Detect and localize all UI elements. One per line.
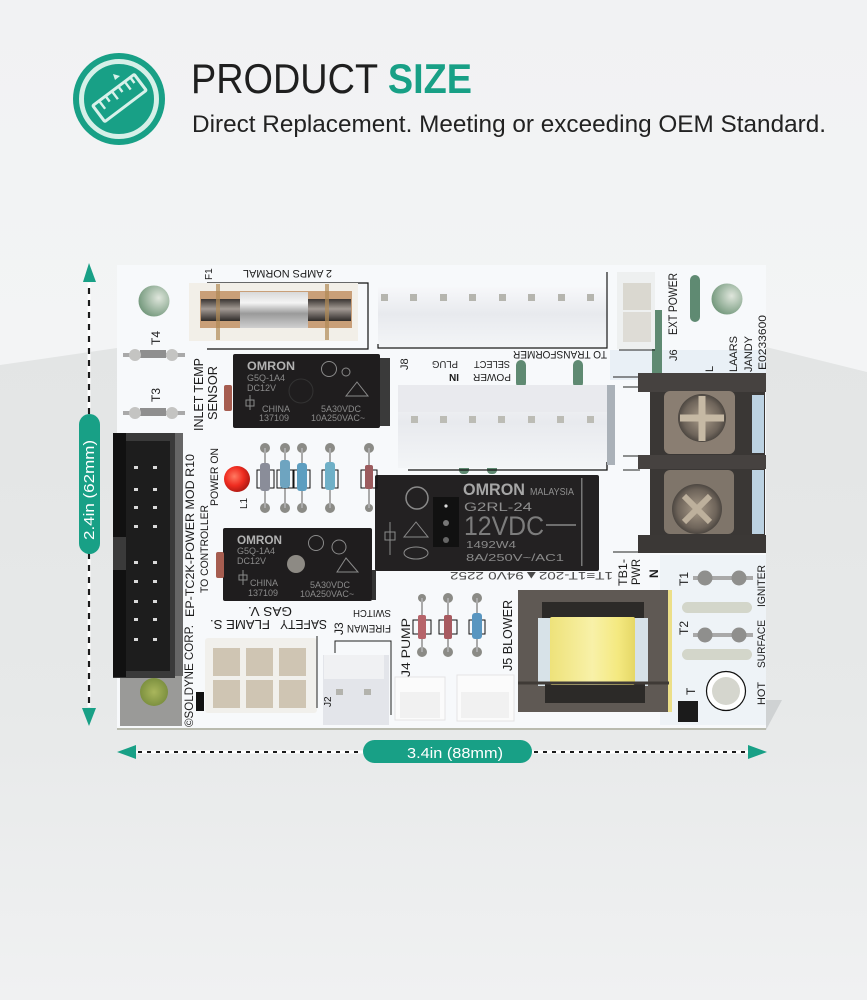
relay: lower Omron: CHINA xyxy=(250,578,278,588)
silkscreen labels: SELECT xyxy=(474,358,510,369)
silkscreen labels: IGNITER xyxy=(756,565,768,607)
J7 connector xyxy=(398,385,615,470)
silkscreen labels: 1T≡1T-202▲94V0 2252 xyxy=(450,569,613,581)
silkscreen labels: ©SOLDYNE CORP. xyxy=(182,625,196,727)
height dimension arrow xyxy=(82,263,96,726)
silkscreen labels: F1 xyxy=(204,268,215,280)
silkscreen labels: J3 xyxy=(332,622,346,635)
silkscreen labels: T3 xyxy=(149,388,163,402)
J2 connector xyxy=(323,641,391,725)
silkscreen labels: JANDY xyxy=(743,335,755,372)
silkscreen labels: SENSOR xyxy=(205,366,220,420)
fuse holder xyxy=(189,283,368,349)
relay: upper Omron: 137109 xyxy=(259,413,289,423)
beige slots and hot pad xyxy=(678,602,752,722)
relay: large Omron: MALAYSIA xyxy=(530,487,574,498)
relay: upper Omron: 10A250VAC~ xyxy=(311,413,365,423)
terminal block xyxy=(613,373,766,553)
silkscreen labels: POWER xyxy=(473,371,511,382)
relay: lower Omron: 5A30VDC xyxy=(310,580,351,590)
relay: upper Omron: 5A30VDC xyxy=(321,404,362,414)
silkscreen labels: SAFETY xyxy=(280,617,327,632)
silkscreen labels: J4 PUMP xyxy=(399,618,413,677)
relay: upper Omron: G5Q-1A4 xyxy=(247,373,285,383)
relay: large Omron: 1492W4 xyxy=(466,540,517,551)
silkscreen labels: J6 xyxy=(668,349,680,361)
J8 connector xyxy=(378,272,608,348)
relay: upper Omron xyxy=(233,354,390,428)
silkscreen labels: INLET TEMP xyxy=(191,358,206,431)
silkscreen labels: POWER ON xyxy=(209,448,221,506)
T1 T2 tabs xyxy=(693,570,753,642)
relay: upper Omron: DC12V xyxy=(247,383,276,393)
height label pill: 2.4in (62mm) xyxy=(81,440,98,540)
silkscreen labels: TO CONTROLLER xyxy=(199,505,211,593)
silkscreen labels: L xyxy=(704,366,716,372)
silkscreen labels: FLAME S. xyxy=(210,617,270,632)
relay: lower Omron xyxy=(223,528,376,601)
LED xyxy=(224,466,250,492)
relay: lower Omron: OMRON xyxy=(237,533,282,547)
relay: large Omron: G2RL-24 xyxy=(464,500,532,514)
silkscreen labels: T2 xyxy=(677,621,691,635)
silkscreen labels: N xyxy=(647,569,661,578)
height label pill xyxy=(79,414,100,554)
silkscreen labels: 2 AMPS NORMAL xyxy=(243,267,332,279)
relay: large Omron: 12VDC xyxy=(464,511,544,541)
silkscreen labels: L1 xyxy=(239,497,250,509)
width dimension arrow xyxy=(117,745,767,759)
green slots xyxy=(459,275,700,474)
silkscreen labels: EP-TC2K-POWER MOD R10 xyxy=(185,454,197,617)
silkscreen labels: SWITCH xyxy=(353,607,391,618)
T3 T4 tabs xyxy=(123,349,185,419)
width label pill xyxy=(363,740,532,763)
relay: lower Omron: 10A250VAC~ xyxy=(300,589,354,599)
silkscreen labels: IN xyxy=(449,371,459,382)
width label pill: 3.4in (88mm) xyxy=(407,745,503,762)
silkscreen labels: FIREMAN xyxy=(347,622,391,634)
resistors and diodes xyxy=(216,385,485,657)
relay: upper Omron: OMRON xyxy=(247,359,295,373)
relay: lower Omron: G5Q-1A4 xyxy=(237,546,275,556)
silkscreen labels: PLUG xyxy=(432,358,458,369)
silkscreen labels: HOT xyxy=(756,682,768,705)
silkscreen labels: SURFACE xyxy=(756,620,768,668)
relay: large Omron xyxy=(375,475,599,571)
silkscreen labels: PWR xyxy=(629,559,643,585)
relay: lower Omron: 137109 xyxy=(248,588,278,598)
silkscreen labels: GAS V. xyxy=(248,604,292,619)
circuit board xyxy=(113,265,782,730)
relay: large Omron: OMRON xyxy=(463,480,525,499)
silkscreen labels: TO TRANSFORMER xyxy=(513,348,607,360)
J3 safety connector xyxy=(196,636,317,713)
silkscreen labels: E0233600 xyxy=(757,315,769,370)
relay: upper Omron: CHINA xyxy=(262,404,290,414)
subtitle: Direct Replacement. Meeting or exceeding OEM Standard. xyxy=(192,111,826,138)
silkscreen labels: J5 BLOWER xyxy=(500,600,515,671)
relay: large Omron: 8A/250V~/AC1 xyxy=(466,552,564,564)
mounting holes xyxy=(138,284,742,316)
silkscreen labels: J2 xyxy=(323,696,334,707)
silkscreen labels: TB1- xyxy=(616,559,630,586)
silkscreen labels: LAARS xyxy=(728,336,740,372)
J4 J5 connectors xyxy=(395,675,514,721)
silkscreen labels xyxy=(149,267,769,727)
silkscreen labels: J8 xyxy=(399,358,411,370)
J6 connector xyxy=(617,272,655,350)
silkscreen labels: T4 xyxy=(149,331,163,345)
title: PRODUCT SIZE xyxy=(191,55,472,102)
icon: ruler badge xyxy=(73,53,165,145)
silkscreen labels: EXT POWER xyxy=(668,273,680,335)
transformer xyxy=(518,590,672,712)
left header connector xyxy=(113,433,183,726)
silkscreen labels: T xyxy=(684,687,698,695)
relay: lower Omron: DC12V xyxy=(237,556,266,566)
silkscreen labels: T1 xyxy=(677,572,691,586)
